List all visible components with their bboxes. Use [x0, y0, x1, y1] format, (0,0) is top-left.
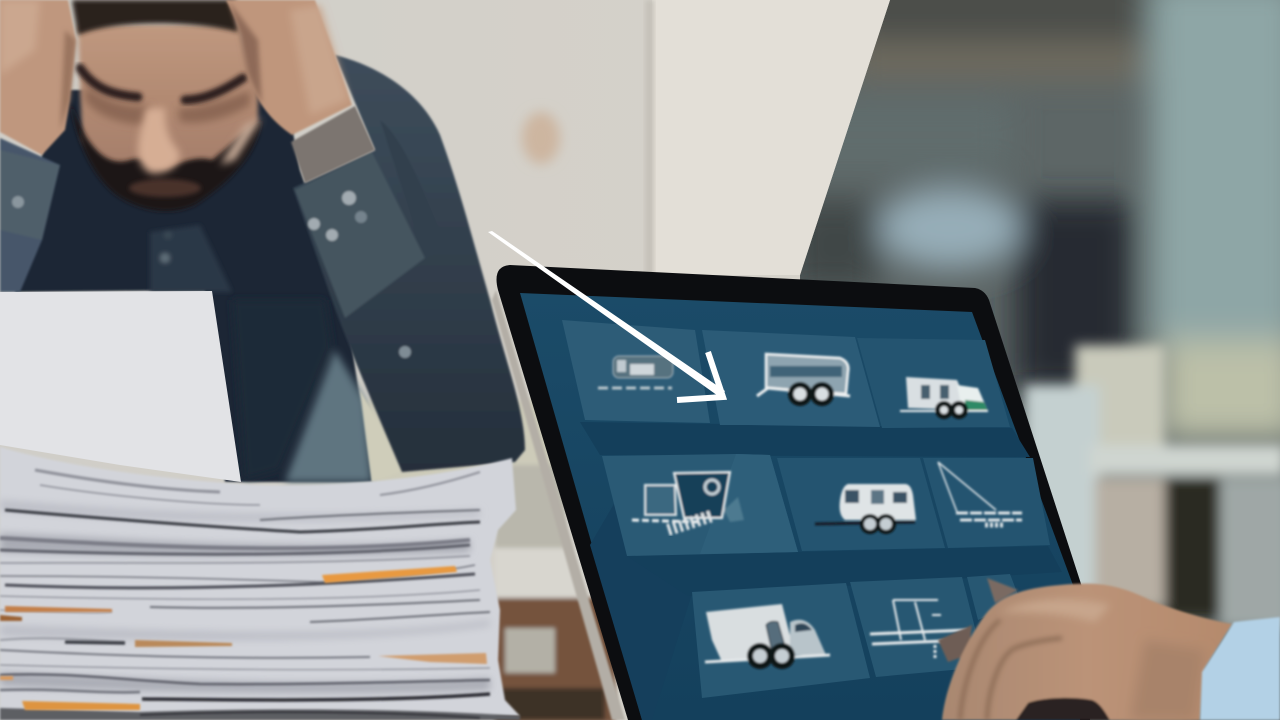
- trailer icon 7: [705, 604, 830, 669]
- stack of papers: [0, 447, 520, 720]
- laptop bezel: [496, 265, 1090, 720]
- trailer icon 3: [900, 377, 988, 419]
- beard: [70, 100, 262, 211]
- trailer icon 5: [815, 484, 916, 534]
- man with hands on head: [0, 0, 525, 482]
- laptop silver edge: [492, 290, 625, 720]
- finger creases: [960, 620, 1062, 720]
- darker row bands: [580, 422, 1062, 596]
- fingernail: [987, 578, 1018, 603]
- beige wall panel left of diagonal: [0, 0, 890, 720]
- laptop: [492, 265, 1090, 720]
- watch band cuff: [291, 106, 375, 183]
- shadow under finger on screen: [938, 625, 972, 662]
- gap under palm: [1015, 696, 1115, 720]
- wrist shade: [1130, 640, 1205, 720]
- mouth shadow: [129, 179, 201, 197]
- nose highlight: [138, 108, 180, 173]
- trailer icon 1: [598, 356, 673, 388]
- panel: trailer tiles: [562, 320, 1050, 698]
- hand touching screen: [938, 578, 1232, 720]
- left arm sleeve: [0, 138, 60, 292]
- trailer icon 4: [632, 472, 744, 530]
- hand body: [942, 584, 1232, 720]
- paper layer bands: [0, 500, 490, 693]
- white arrow from paperwork to screen: [488, 231, 725, 400]
- knuckle highlight: [1000, 600, 1110, 622]
- orange sticky tabs: [0, 566, 487, 710]
- darker diagonal shade on screen: [590, 455, 736, 720]
- screen: [520, 293, 1080, 720]
- shirt placket and buttons: [150, 225, 232, 292]
- loose paper sheet: [0, 291, 241, 482]
- background gap beside torso: [360, 390, 405, 482]
- shirt torso: [15, 90, 372, 482]
- trailer icon 6: [938, 462, 1022, 525]
- left hand: [0, 0, 76, 155]
- shirt lower fold: [232, 300, 372, 482]
- eye socket shadow: [85, 85, 250, 125]
- blurred office background right: [780, 0, 1280, 720]
- shirt cuff light blue: [1200, 617, 1280, 720]
- face: [78, 25, 258, 205]
- brows: [80, 68, 243, 100]
- trailer icon 2: [757, 354, 850, 406]
- hair: [72, 0, 238, 35]
- trailer icon 8: [870, 600, 968, 660]
- cheek highlight: [220, 118, 262, 165]
- right hand: [226, 0, 352, 135]
- right arm sleeve: [293, 55, 525, 472]
- table and objects behind stack: [360, 400, 615, 720]
